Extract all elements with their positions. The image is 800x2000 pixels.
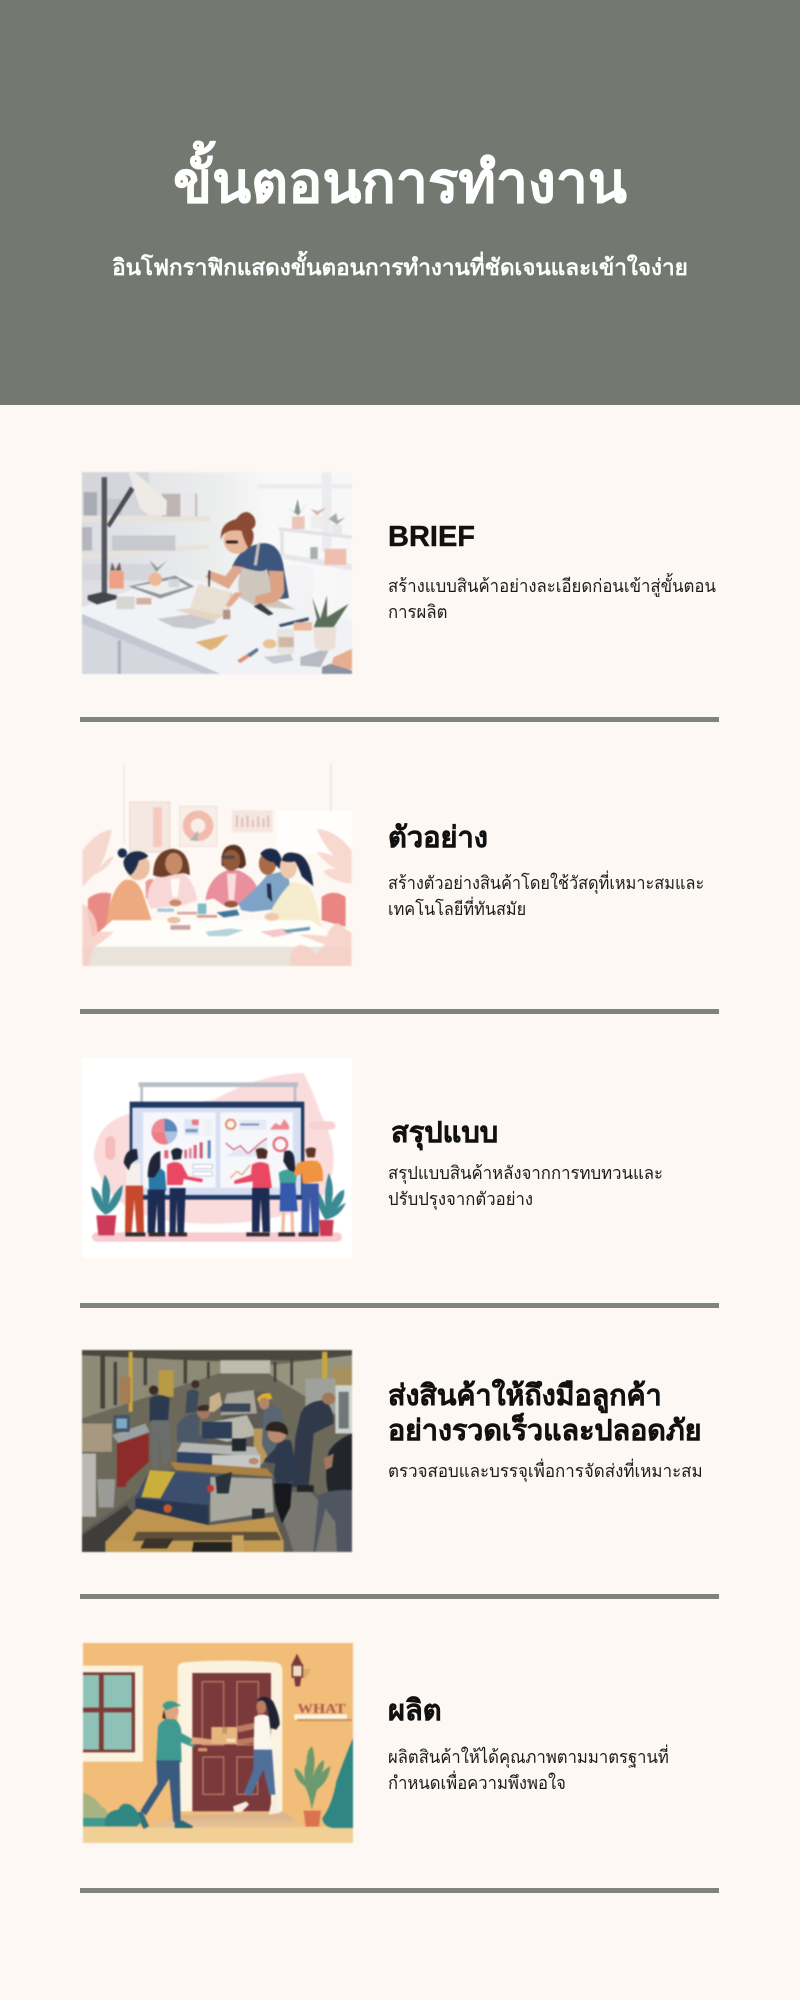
foreground foliage [82, 904, 114, 966]
door [178, 1661, 282, 1811]
heading: สรุปแบบ [391, 1117, 498, 1149]
group right [234, 1147, 323, 1235]
lamp [88, 472, 167, 604]
front machine [135, 1470, 274, 1525]
sign: WHAT [297, 1701, 346, 1716]
panel: step 5 production [80, 1642, 719, 1893]
header band [0, 0, 800, 405]
customer [233, 1697, 280, 1815]
description: สร้างตัวอย่างสินค้าโดยใช้วัสดุที่เหมาะสมและ [388, 873, 704, 893]
courier [136, 1701, 213, 1829]
heading: ตัวอย่าง [388, 822, 488, 854]
desk [82, 574, 352, 674]
divider line [80, 1009, 719, 1014]
heading: อย่างรวดเร็วและปลอดภัย [388, 1415, 701, 1447]
description: เทคโนโลยีที่ทันสมัย [388, 898, 526, 918]
lantern [291, 1654, 311, 1686]
wall charts [130, 802, 170, 852]
person 5 [268, 852, 330, 942]
plants [91, 1175, 123, 1235]
description: การผลิต [388, 602, 447, 622]
hands [167, 917, 180, 923]
floor [82, 1392, 352, 1552]
table items [198, 904, 206, 914]
model box [190, 584, 230, 616]
chairs [88, 893, 111, 938]
divider line [80, 1594, 719, 1599]
parcel [211, 1727, 237, 1744]
middle machine [177, 1442, 260, 1457]
pallets [105, 1508, 283, 1542]
window [83, 1666, 143, 1762]
description [388, 1744, 669, 1792]
title: ขั้นตอนการทำงาน [173, 151, 627, 215]
table [82, 920, 352, 947]
illustration: team meeting around a table [82, 764, 352, 966]
description: สรุปแบบสินค้าหลังจากการทบทวนและ [388, 1163, 663, 1183]
sign [294, 1701, 352, 1721]
heading: BRIEF [388, 521, 475, 553]
description [388, 1163, 663, 1210]
donut and panels [226, 1120, 235, 1129]
person 3 [205, 845, 259, 905]
description: ผลิตสินค้าให้ได้คุณภาพตามมาตรฐานที่ [388, 1747, 669, 1767]
heading: ผลิต [388, 1695, 442, 1727]
chair [287, 566, 313, 612]
heading: ส่งสินค้าให้ถึงมือลูกค้า [388, 1380, 662, 1412]
pie [164, 1119, 177, 1132]
description: ปรับปรุงจากตัวอย่าง [388, 1188, 533, 1208]
description [388, 573, 716, 622]
shelves right [279, 527, 352, 539]
panel: step 3 summary [80, 1058, 719, 1308]
steps [166, 1812, 294, 1821]
divider line [80, 1303, 719, 1308]
heading [388, 1378, 701, 1447]
divider line [80, 717, 719, 722]
panel: step 4 delivery [80, 1349, 719, 1599]
description [388, 870, 704, 918]
person 4 [239, 849, 289, 912]
illustration: woman crafting a model at a studio desk [81, 472, 353, 675]
illustration: factory assembly line [81, 1349, 353, 1553]
group left [124, 1148, 203, 1233]
left benches [112, 1424, 150, 1444]
workers back [149, 1380, 335, 1492]
panel: step 1 brief [80, 472, 719, 722]
divider line [80, 1888, 719, 1893]
worker front center [249, 1422, 294, 1524]
line stations far [202, 1415, 257, 1442]
right bush [322, 1738, 353, 1828]
panel: step 2 sample [80, 764, 719, 1014]
screen rail [139, 1082, 298, 1087]
description: สร้างแบบสินค้าอย่างละเอียดก่อนเข้าสู่ขั้นตอน [388, 576, 716, 596]
shoes [125, 1232, 319, 1236]
leaves [82, 830, 114, 887]
illustration: parcel delivered at a front door [82, 1642, 354, 1844]
screen [130, 1102, 304, 1200]
bars [164, 1150, 168, 1158]
worker right foreground [314, 1434, 352, 1552]
subtitle: อินโฟกราฟิกแสดงขั้นตอนการทำงานที่ชัดเจนและเข้าใจง่าย [112, 255, 688, 280]
potted succulent [312, 596, 349, 651]
left shrubs [83, 1793, 108, 1826]
desk objects left [109, 571, 124, 588]
person 2 [147, 849, 197, 909]
person 1 [106, 848, 180, 942]
description: กำหนดเพื่อความพึงพอใจ [388, 1772, 566, 1792]
illustration: team reviewing charts on a screen [82, 1058, 352, 1258]
potted plant [294, 1746, 330, 1827]
tools & items [254, 603, 274, 616]
woman [205, 512, 295, 610]
description: ตรวจสอบและบรรจุเพื่อการจัดส่งที่เหมาะสม [388, 1461, 703, 1481]
